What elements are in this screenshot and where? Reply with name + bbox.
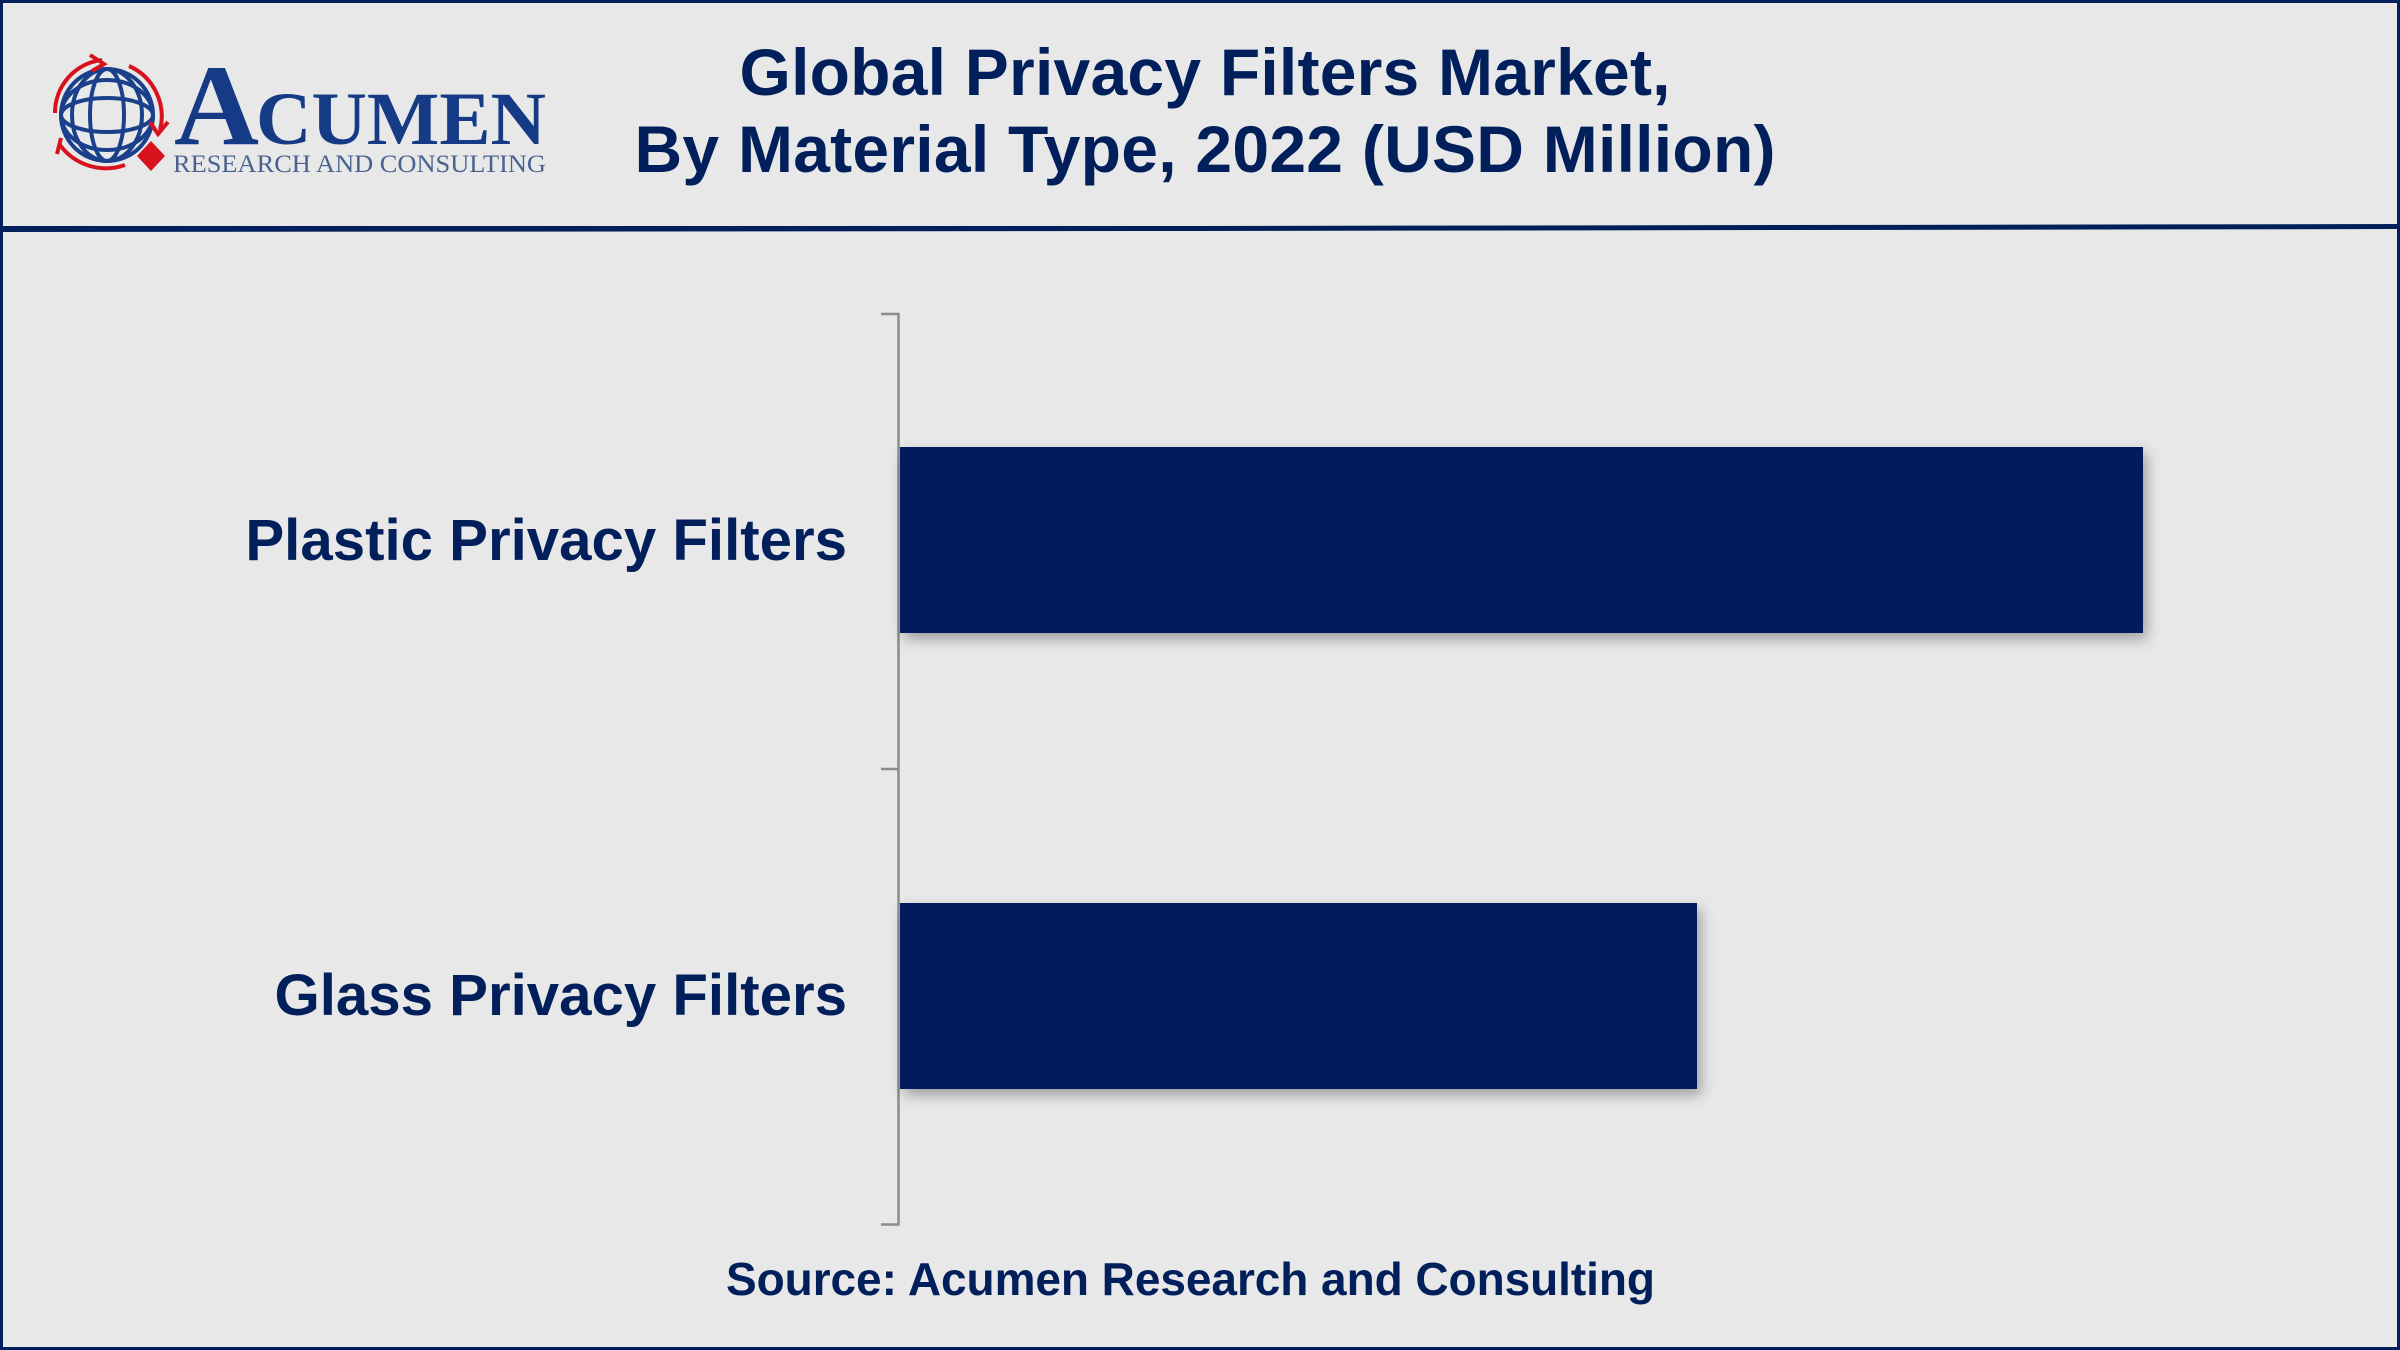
title: By Material Type, 2022 (USD Million) — [634, 112, 1776, 186]
title: Global Privacy Filters Market, — [740, 35, 1670, 109]
icon: red diamond — [137, 141, 165, 171]
label: Plastic Privacy Filters: Plastic Privacy Filters — [245, 508, 847, 573]
bar: Plastic Privacy Filters — [900, 447, 2143, 633]
logo wordmark: A — [174, 42, 259, 170]
label: Glass Privacy Filters: Glass Privacy Filters — [274, 963, 847, 1028]
icon: globe — [61, 69, 153, 161]
source: Source: Acumen Research and Consulting — [726, 1253, 1655, 1305]
logo: Acumen Research and Consulting: CUMEN — [256, 78, 546, 161]
header divider — [0, 224, 2400, 232]
icon: red cycle arrows — [55, 55, 168, 168]
bar chart — [245, 314, 2143, 1224]
logo: Acumen Research and Consulting — [55, 42, 546, 178]
axis — [881, 314, 898, 1224]
title — [634, 35, 1776, 186]
bar: Glass Privacy Filters — [900, 903, 1697, 1089]
logo: Acumen Research and Consulting: RESEARCH AND CONSULTING — [173, 151, 546, 178]
